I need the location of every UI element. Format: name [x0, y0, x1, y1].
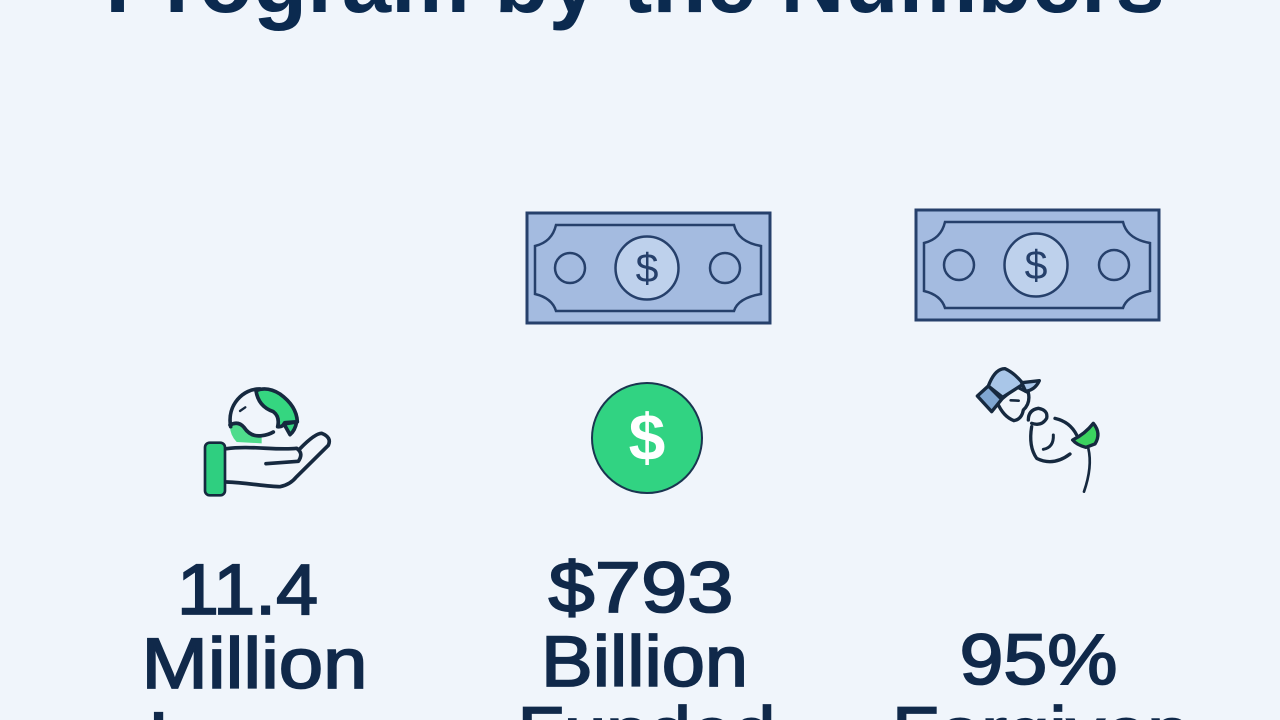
- stat: forgiven: [892, 621, 1190, 720]
- icon: dollar bill, right column: [916, 210, 1159, 320]
- icon: dollar bill, right column: $: [1025, 242, 1048, 288]
- icon: green dollar coin: [592, 383, 702, 493]
- stat: loans: Million: [142, 625, 368, 704]
- stat: forgiven: 95%: [960, 621, 1118, 700]
- icon: dollar bill, middle column: $: [636, 245, 659, 291]
- stat: funded: Billion: [541, 623, 748, 702]
- stat: loans: 11.4: [177, 551, 318, 630]
- stat: funded: $793: [548, 549, 734, 628]
- stat: funded: [518, 549, 776, 720]
- icon: dollar bill, middle column: [527, 213, 770, 323]
- icon: person with cap and sprout: [977, 369, 1098, 492]
- stat: loans: [142, 551, 368, 720]
- icon: hand holding globe: [205, 389, 329, 495]
- icon: green dollar coin: $: [629, 400, 665, 474]
